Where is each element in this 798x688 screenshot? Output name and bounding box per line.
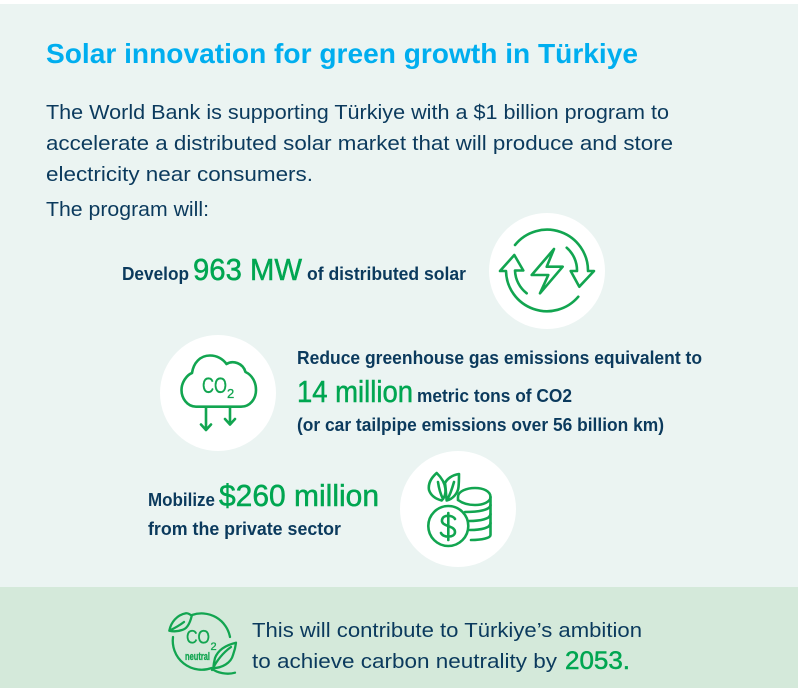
intro text [46, 101, 673, 186]
program lead-in: The program will: [46, 198, 209, 221]
conclusion text [252, 619, 642, 675]
icon: renewable energy cycle [489, 213, 605, 329]
text: reduce emissions: Reduce greenhouse gas emissions equivalent to [297, 348, 702, 368]
panel: bottom band [0, 587, 798, 688]
text: mobilize $260 million: $260 million [219, 478, 379, 513]
text: reduce emissions [297, 348, 702, 435]
text: develop 963 MW: Develop [122, 264, 189, 284]
icon: CO2 neutral: 2 [210, 641, 217, 653]
intro text: electricity near consumers. [46, 163, 313, 186]
icon: CO2 cloud: 2 [227, 386, 234, 401]
icon: CO2 cloud [160, 335, 276, 451]
icon: CO2 neutral: CO [186, 628, 210, 648]
text: develop 963 MW: 963 MW [193, 252, 303, 287]
icon: CO2 cloud: CO [202, 373, 227, 398]
intro text: accelerate a distributed solar market that will produce and store [46, 132, 673, 155]
text: develop 963 MW: of distributed solar [307, 264, 466, 284]
intro text: The World Bank is supporting Türkiye with a $1 billion program to [46, 101, 669, 124]
text: mobilize $260 million: Mobilize [148, 490, 215, 510]
text: reduce emissions: (or car tailpipe emissions over 56 billion km) [297, 415, 664, 435]
text: mobilize $260 million: from the private sector [148, 519, 341, 539]
icon: CO2 neutral [169, 613, 236, 674]
text: reduce emissions: 14 million [297, 374, 413, 409]
title: Solar innovation for green growth in Türkiye [46, 38, 638, 69]
conclusion text: 2053. [565, 647, 630, 675]
icon: CO2 neutral: neutral [185, 651, 210, 663]
text: develop 963 MW [122, 252, 466, 287]
conclusion text: This will contribute to Türkiye’s ambition [252, 619, 642, 642]
text: reduce emissions: metric tons of CO2 [417, 386, 572, 406]
text: mobilize $260 million [148, 478, 379, 539]
conclusion text: to achieve carbon neutrality by [252, 650, 558, 673]
icon: coins and leaves [400, 451, 516, 567]
